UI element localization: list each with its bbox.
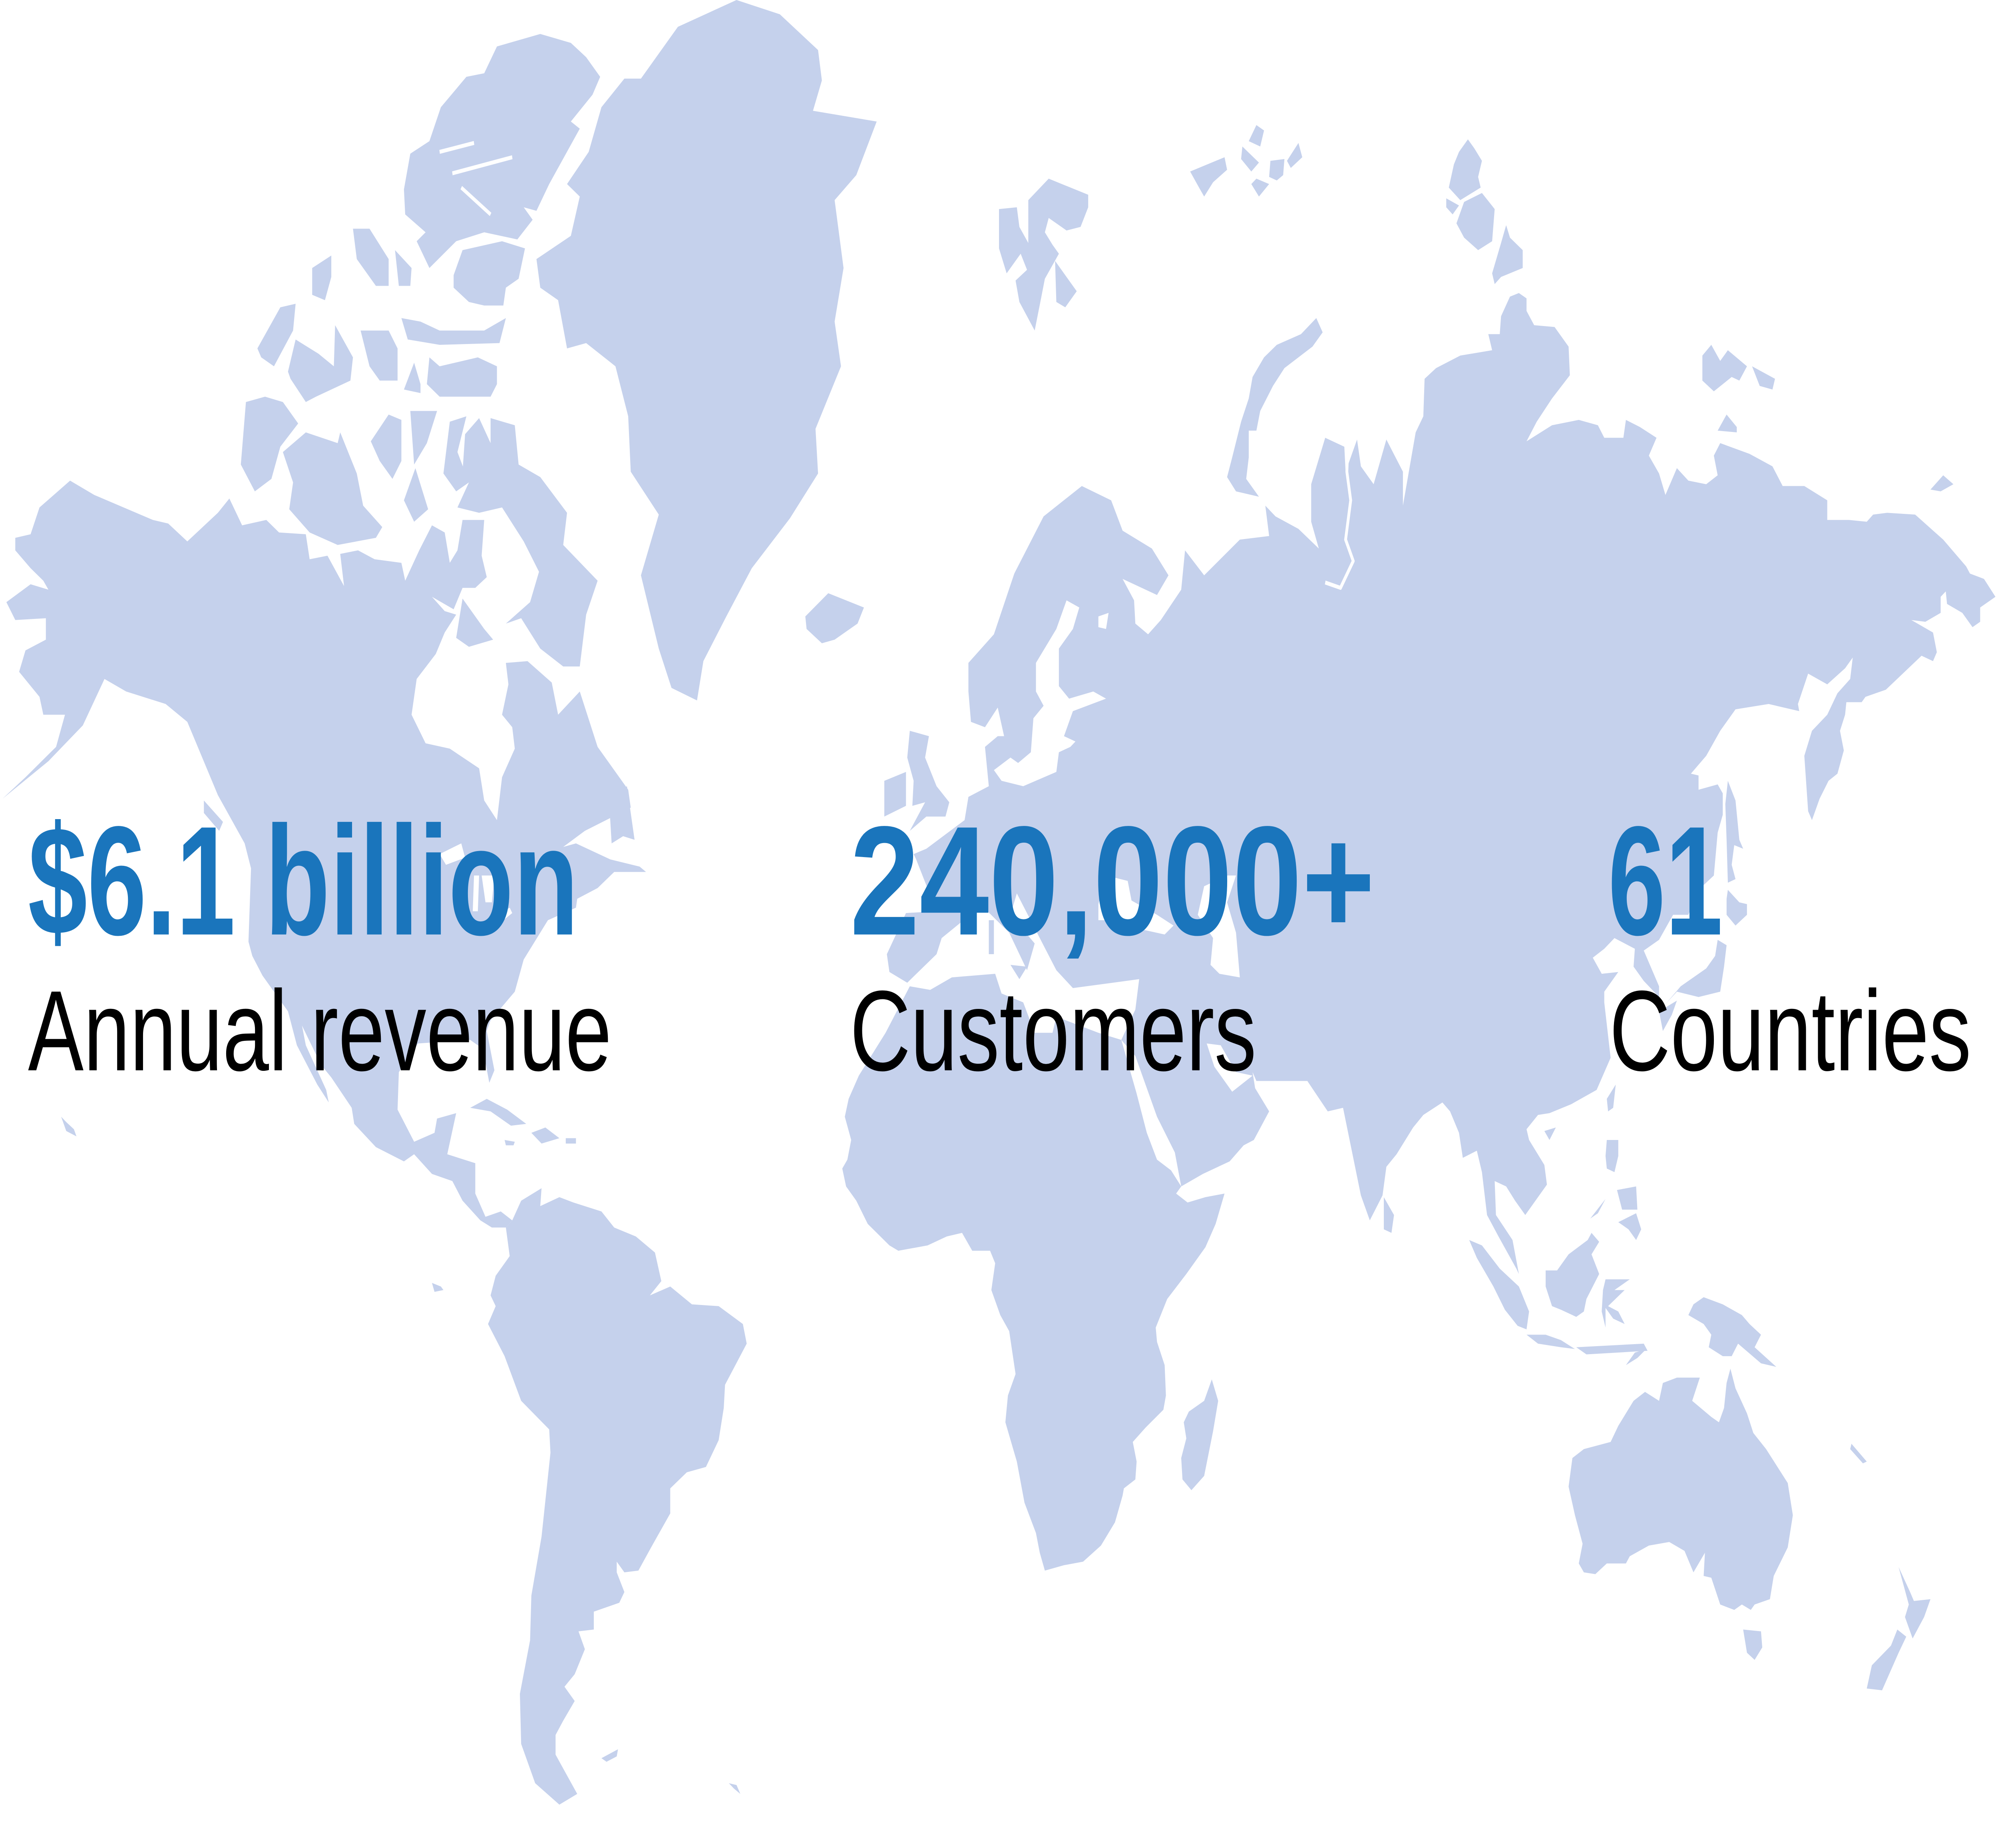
New Zealand south — [1867, 1629, 1906, 1690]
New Siberian Islands — [1702, 345, 1747, 391]
Taiwan — [1607, 1084, 1616, 1111]
Sicily — [1011, 965, 1027, 979]
Ellef Ringnes — [312, 255, 331, 300]
Ellesmere and Axel Heiberg — [404, 34, 600, 268]
Palawan — [1590, 1199, 1606, 1219]
Honshu — [1666, 940, 1727, 1004]
Lake Michigan — [473, 875, 479, 911]
Bathurst Island — [360, 330, 398, 380]
Galapagos — [432, 1283, 444, 1292]
Bathurst group — [353, 229, 389, 286]
Madagascar — [1181, 1379, 1218, 1490]
Severnaya Zemlya north — [1449, 139, 1482, 200]
Somerset Island — [410, 411, 437, 465]
Severnaya Zemlya south — [1492, 225, 1523, 284]
New Caledonia — [1850, 1444, 1867, 1463]
Persian Gulf — [1207, 1044, 1253, 1092]
Corsica — [989, 920, 994, 954]
Franz Josef Land west — [1190, 157, 1227, 197]
Franz Josef Land centre — [1241, 147, 1259, 171]
Baffin Island — [458, 418, 598, 666]
Devon Island — [454, 241, 525, 306]
Banks Island — [241, 397, 298, 491]
channels — [440, 143, 1353, 588]
label: Customers — [850, 967, 1256, 1095]
South Georgia — [729, 1783, 740, 1794]
value: $6.1 billion — [28, 794, 579, 968]
Prince of Wales Island — [371, 414, 401, 479]
Hispaniola — [531, 1128, 559, 1144]
Melville Island — [288, 325, 353, 402]
value: 61 — [1608, 794, 1723, 968]
Devon south — [401, 318, 506, 345]
Franz Josef Land north — [1249, 125, 1264, 147]
Falkland Islands — [601, 1749, 618, 1762]
Prince Patrick — [257, 304, 296, 366]
inland water — [440, 601, 1253, 1092]
Newfoundland — [609, 786, 635, 843]
Great Britain — [907, 731, 949, 831]
Edge Island — [1055, 261, 1077, 307]
label: Annual revenue — [28, 967, 612, 1095]
Pioneer Island — [1446, 198, 1459, 215]
Timor — [1626, 1349, 1646, 1365]
Puerto Rico — [566, 1138, 576, 1144]
Sri Lanka — [1384, 1197, 1394, 1233]
Ireland — [884, 772, 906, 817]
New Guinea — [1688, 1297, 1776, 1367]
Borneo — [1546, 1233, 1599, 1317]
Franz Josef Land east — [1269, 159, 1284, 181]
Lake Ladoga — [1099, 613, 1108, 629]
Franz Josef Land far east — [1287, 143, 1302, 168]
Sulawesi — [1602, 1279, 1630, 1328]
Mindanao — [1618, 1213, 1641, 1240]
Hokkaido — [1727, 890, 1747, 925]
label: Countries — [1609, 967, 1971, 1095]
Somerset strip — [427, 357, 497, 397]
Jamaica — [505, 1140, 515, 1145]
South America — [488, 1188, 747, 1805]
Hainan — [1544, 1128, 1556, 1140]
Baffin west — [444, 416, 469, 491]
King William Island — [404, 468, 428, 522]
Gulf of Ob — [1325, 438, 1353, 588]
Sakhalin — [1725, 781, 1743, 883]
Lake Erie — [491, 908, 512, 927]
Black Sea — [1099, 875, 1174, 935]
Australia — [1568, 1369, 1793, 1610]
New Zealand north — [1898, 1567, 1930, 1639]
Lesser Sunda — [1576, 1344, 1648, 1355]
Greenland — [536, 0, 877, 700]
Lake Huron — [482, 875, 494, 902]
Kotelny — [1752, 366, 1775, 390]
stat: countries — [1608, 794, 1971, 1095]
Luzon — [1606, 1140, 1618, 1172]
Baltic Sea — [994, 601, 1106, 786]
Franz Josef Land south — [1251, 179, 1269, 197]
Lyakhov — [1717, 414, 1737, 432]
Lake Superior — [440, 843, 465, 865]
Sumatra — [1469, 1240, 1529, 1329]
North America — [2, 481, 646, 1227]
Svalbard — [999, 179, 1088, 330]
Eurasia — [887, 293, 1996, 1274]
stat: annual revenue — [28, 794, 612, 1095]
Victoria Island — [283, 432, 382, 545]
Severnaya Zemlya centre — [1457, 193, 1495, 250]
Cornwall Island — [395, 250, 412, 286]
Iceland — [805, 593, 864, 643]
Visayas — [1617, 1186, 1638, 1209]
Cuba — [470, 1099, 526, 1126]
Kyushu — [1659, 1001, 1677, 1031]
value: 240,000+ — [850, 794, 1375, 968]
stat: customers — [850, 794, 1375, 1095]
Africa — [842, 974, 1224, 1571]
Novaya Zemlya — [1227, 318, 1323, 497]
Wrangel Island — [1930, 475, 1953, 491]
Vancouver Island — [204, 800, 223, 831]
Southampton Island — [456, 599, 493, 647]
Ellesmere fjords — [440, 143, 512, 215]
Caspian Sea — [1198, 875, 1240, 977]
Tasmania — [1743, 1629, 1762, 1660]
Prince of Wales small — [404, 363, 420, 393]
Hawaii — [61, 1117, 76, 1136]
Java — [1526, 1335, 1575, 1349]
